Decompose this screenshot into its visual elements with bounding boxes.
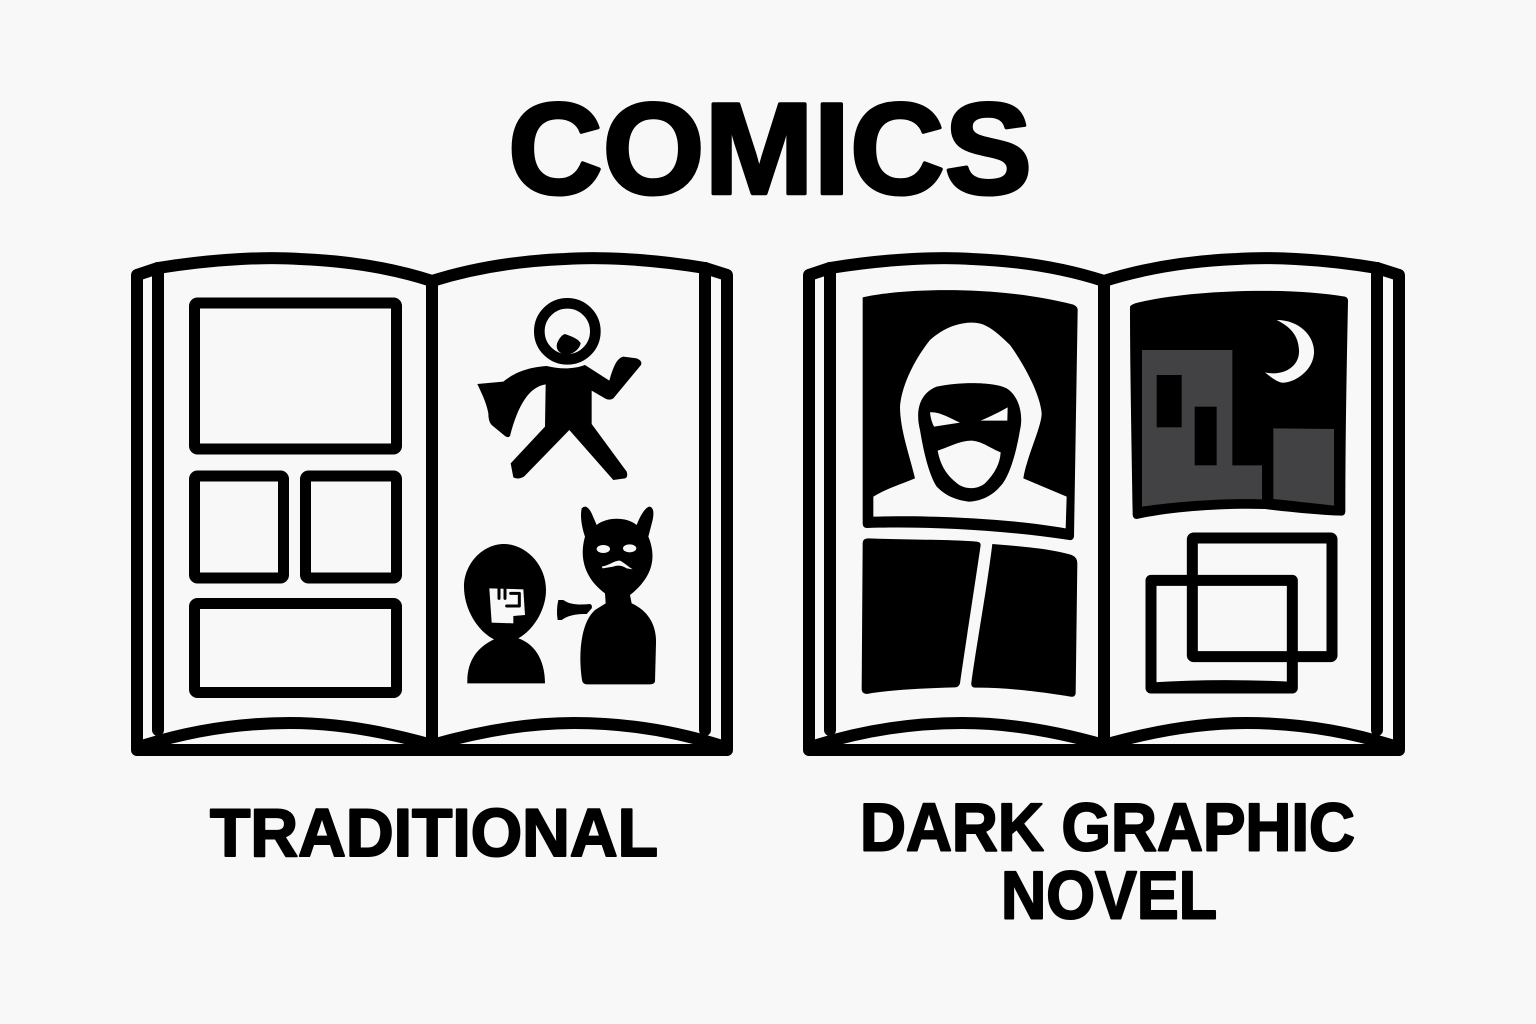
book outline: traditional xyxy=(137,258,727,750)
comic panels: traditional xyxy=(194,303,396,692)
title: COMICS xyxy=(508,76,1032,222)
label: traditional: TRADITIONAL xyxy=(210,795,658,871)
icon: horned villain xyxy=(557,507,656,684)
label: dark graphic novel xyxy=(860,790,1355,934)
icon: masked hero with fist xyxy=(464,544,546,683)
panel: overlapping frames xyxy=(1151,538,1332,688)
book: traditional xyxy=(137,258,727,750)
book: dark graphic novel xyxy=(809,258,1399,750)
label: dark graphic novel: DARK GRAPHIC xyxy=(860,790,1355,866)
panel: night city xyxy=(1130,291,1348,519)
icon: superhero xyxy=(477,303,641,480)
panel: split black panels xyxy=(862,538,1077,697)
book outline: dark graphic novel xyxy=(809,258,1399,750)
panel: hooded figure xyxy=(863,290,1078,540)
label: dark graphic novel: NOVEL xyxy=(1001,858,1217,934)
